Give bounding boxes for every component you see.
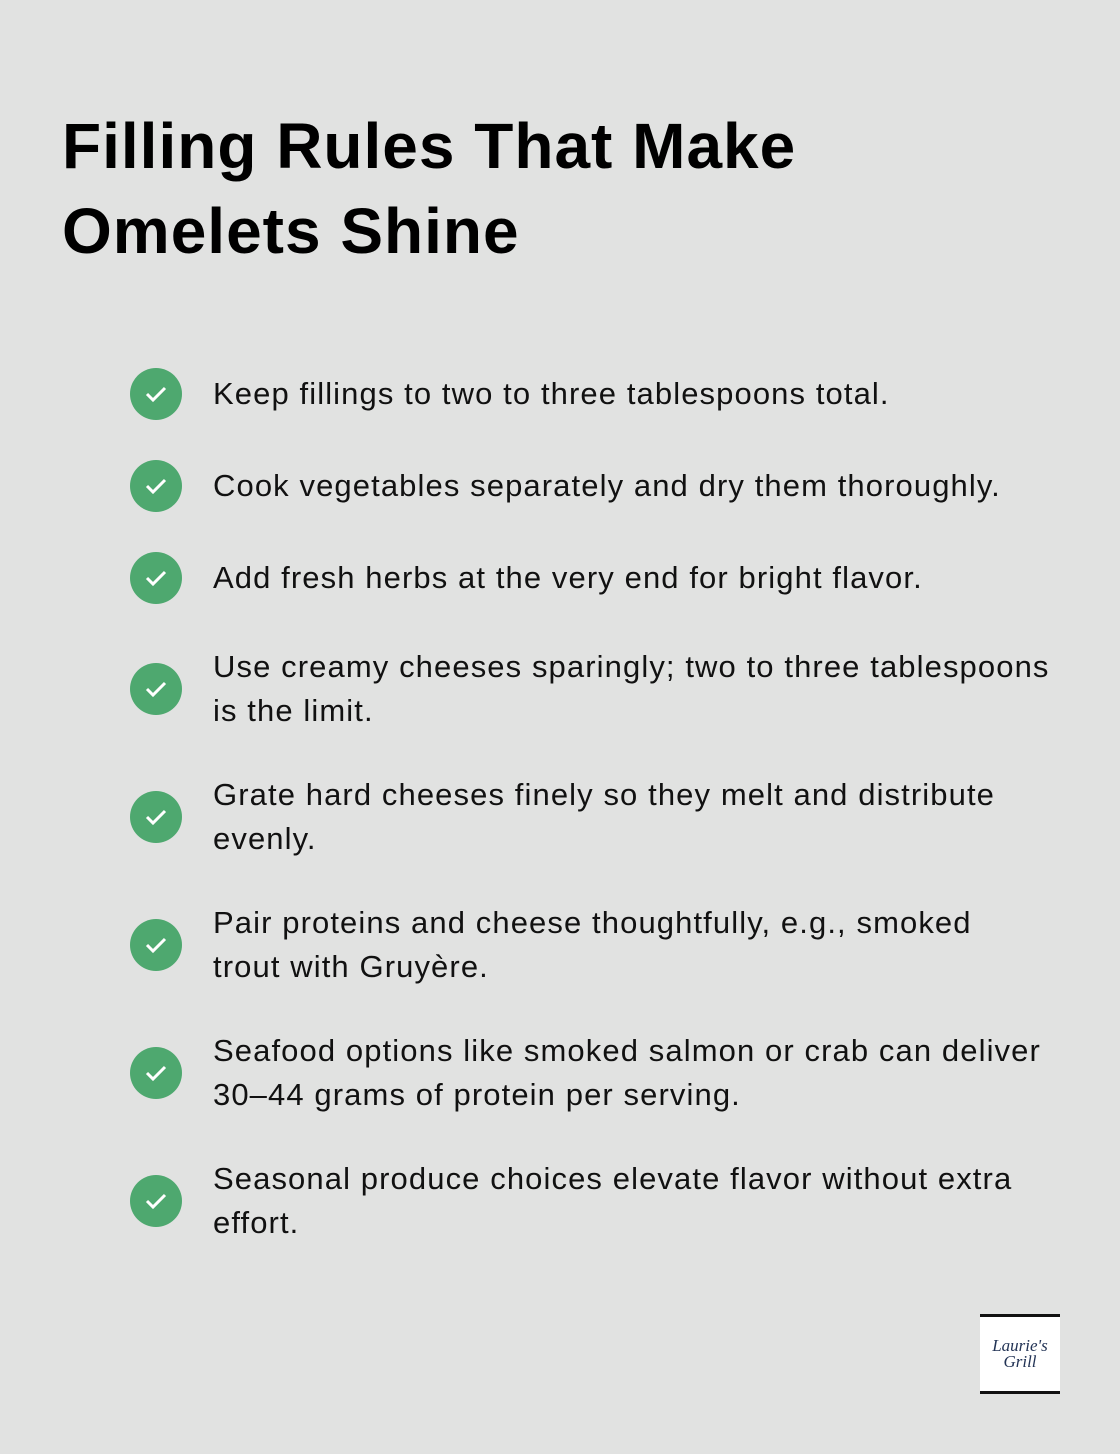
logo: Grill [1003,1352,1037,1371]
icon: check [130,791,182,843]
item 5 [130,777,995,856]
item 2 [130,460,1001,512]
logo: Laurie's [992,1336,1048,1355]
title: Filling Rules That Make [62,110,796,182]
item 7 [130,1033,1041,1112]
item 8 [130,1161,1012,1240]
icon: check [130,460,182,512]
item 1: Keep fillings to two to three tablespoons total. [213,376,890,411]
item 6: trout with Gruyère. [213,949,489,984]
title: Omelets Shine [62,195,520,267]
item 6: Pair proteins and cheese thoughtfully, e.g., smoked [213,905,972,940]
item 1 [130,368,890,420]
item 7: Seafood options like smoked salmon or crab can deliver [213,1033,1041,1068]
item 4: Use creamy cheeses sparingly; two to three tablespoons [213,649,1050,684]
item 5: evenly. [213,821,317,856]
item 6 [130,905,972,984]
item 4: is the limit. [213,693,374,728]
icon: check [130,919,182,971]
icon: check [130,1175,182,1227]
icon: check [130,1047,182,1099]
logo [980,1314,1060,1394]
item 8: effort. [213,1205,299,1240]
item 2: Cook vegetables separately and dry them thoroughly. [213,468,1001,503]
item 7: 30–44 grams of protein per serving. [213,1077,741,1112]
icon: check [130,368,182,420]
item 4 [130,649,1050,728]
icon: check [130,552,182,604]
title [62,110,796,267]
item 3 [130,552,923,604]
item 3: Add fresh herbs at the very end for bright flavor. [213,560,923,595]
item 8: Seasonal produce choices elevate flavor without extra [213,1161,1012,1196]
icon: check [130,663,182,715]
item 5: Grate hard cheeses finely so they melt and distribute [213,777,995,812]
